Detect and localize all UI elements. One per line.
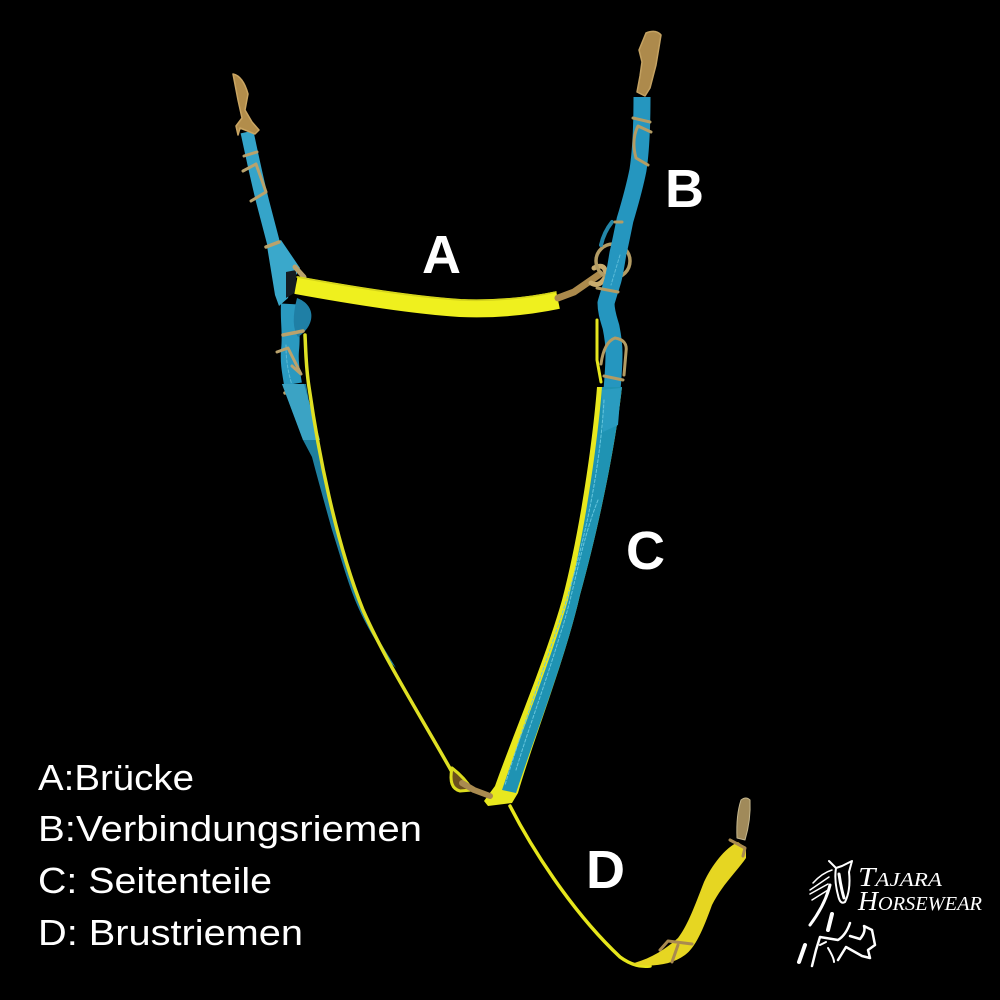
breastplate harness illustration <box>233 31 750 966</box>
bridge clip <box>558 274 600 298</box>
logo text line 1: TAJARA <box>858 862 943 892</box>
strap C right: side piece <box>462 320 622 806</box>
logo: Tajara Horsewear <box>799 861 982 966</box>
strap B right: connecting strap <box>596 31 661 390</box>
chest strap snap hook <box>737 798 750 840</box>
legend item C: C: Seitenteile <box>38 860 272 901</box>
label A: A <box>422 225 461 285</box>
strap C left: side piece <box>282 335 472 791</box>
right snap hook <box>637 31 661 96</box>
strap A: bridge <box>296 266 606 308</box>
label C: C <box>626 521 665 581</box>
left snap hook <box>233 74 259 135</box>
right buckles and keepers <box>597 118 651 380</box>
legend item A: A:Brücke <box>38 757 194 798</box>
label B: B <box>665 159 704 219</box>
icon: horse and dog <box>799 861 875 966</box>
legend <box>38 757 422 953</box>
logo text line 2: HORSEWEAR <box>857 886 982 916</box>
label D: D <box>586 840 625 900</box>
centre ring link <box>462 783 490 796</box>
legend item B: B:Verbindungsriemen <box>38 808 422 849</box>
right ring <box>596 244 630 278</box>
legend item D: D: Brustriemen <box>38 912 303 953</box>
left buckles and keepers <box>243 152 304 393</box>
strap B left: connecting strap <box>233 74 311 393</box>
strap D: chest strap <box>510 798 750 966</box>
